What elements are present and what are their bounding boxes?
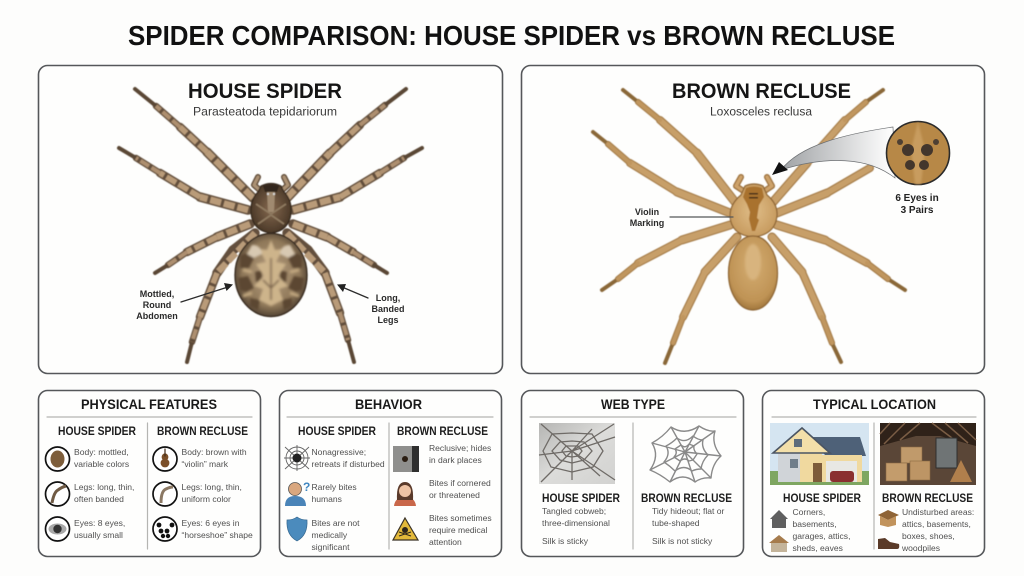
heading: brown recluse: BROWN RECLUSE	[672, 79, 851, 103]
text: medical attention	[429, 513, 492, 547]
text: eyes small	[74, 518, 125, 540]
icon: warning triangle	[393, 518, 418, 540]
panel: brown recluse	[522, 66, 984, 374]
text: recluse locations: boxes, shoes,	[902, 531, 955, 541]
callout: violin marking: Violin	[635, 207, 659, 217]
image: tidy spider web	[650, 426, 721, 482]
text: legs uniform: uniform color	[182, 494, 231, 504]
icon: person with question mark	[285, 480, 310, 506]
text: reclusive	[429, 443, 491, 465]
callout: long banded legs: Banded	[371, 304, 405, 314]
text: cobweb: three-dimensional	[542, 518, 610, 528]
label: 6 eyes in 3 pairs: 3 Pairs	[901, 205, 934, 216]
scientific name: brown recluse: Loxosceles reclusa	[710, 104, 812, 118]
subheading: house spider: HOUSE SPIDER	[783, 493, 862, 505]
icon: cardboard box	[878, 510, 899, 527]
heading: TYPICAL LOCATION	[813, 397, 936, 412]
text: house spider locations	[792, 507, 850, 553]
text: hideout: Silk is not sticky	[652, 536, 713, 546]
panel: physical features	[38, 390, 260, 556]
text: legs uniform: Legs: long, thin,	[182, 482, 242, 492]
icon: leg uniform	[153, 482, 177, 506]
leg: third left	[602, 225, 730, 290]
leg: upper right	[287, 89, 406, 198]
icon: web with spider	[284, 445, 310, 471]
leg: lower left	[665, 237, 737, 363]
text: legs banded: Legs: long, thin,	[74, 482, 134, 492]
text: body violin: Body: brown with	[182, 447, 247, 457]
icon: body mottled	[46, 447, 70, 471]
pedipalps	[736, 177, 772, 192]
callout: violin marking: Marking	[630, 218, 664, 228]
heading: WEB TYPE	[601, 397, 665, 412]
panel: typical location	[762, 390, 984, 556]
leg: lower right	[772, 237, 841, 362]
icon: small house	[770, 510, 788, 528]
text: cobweb: Tangled cobweb;	[542, 506, 606, 516]
subheading: brown recluse: BROWN RECLUSE	[641, 493, 732, 505]
text: body mottled	[74, 447, 129, 469]
text: house spider locations: sheds, eaves	[792, 543, 843, 553]
text: recluse locations: attics, basements,	[902, 519, 971, 529]
text: legs banded	[74, 482, 134, 504]
icon: garage	[769, 535, 789, 552]
text: body violin	[182, 447, 247, 469]
icon: eyes small	[46, 517, 70, 541]
text: hideout	[652, 506, 725, 546]
icon: leg banded	[46, 482, 70, 506]
abdomen: smooth	[728, 236, 778, 310]
subheading: house spider: HOUSE SPIDER	[58, 426, 137, 438]
subheading: house spider: HOUSE SPIDER	[298, 426, 377, 438]
image: house illustration	[770, 423, 869, 485]
text: nonaggressive	[312, 447, 385, 469]
illustration: house spider	[119, 89, 422, 362]
illustration: brown recluse	[593, 90, 905, 363]
text: legs uniform	[182, 482, 242, 504]
subheading: house spider: HOUSE SPIDER	[542, 493, 621, 505]
text: eyes small: usually small	[74, 530, 123, 540]
icon: eyes horseshoe	[153, 517, 177, 541]
text: medical attention: Bites sometimes	[429, 513, 492, 523]
text: eyes horseshoe: “horseshoe” shape	[182, 530, 253, 540]
text: rarely bites: Rarely bites	[312, 482, 357, 492]
text: not medically significant: Bites are not	[312, 518, 360, 528]
text: not medically significant	[312, 518, 360, 552]
text: rarely bites	[312, 482, 357, 504]
leg: third right	[777, 225, 905, 290]
leg: second right	[293, 148, 422, 210]
text: not medically significant: significant	[312, 542, 350, 552]
text: eyes horseshoe	[182, 518, 253, 540]
leg: second left	[593, 132, 730, 213]
text: legs banded: often banded	[74, 494, 124, 504]
text: medical attention: require medical	[429, 525, 488, 535]
subheading: brown recluse: BROWN RECLUSE	[397, 426, 488, 438]
scientific name: house spider: Parasteatoda tepidariorum	[193, 104, 337, 118]
text: recluse locations: woodpiles	[901, 543, 940, 553]
text: body violin: “violin” mark	[182, 459, 229, 469]
callout: mottled round abdomen: Abdomen	[136, 311, 178, 321]
text: cobweb	[542, 506, 610, 546]
eye circle	[886, 122, 950, 184]
text: recluse locations: Undisturbed areas:	[902, 507, 974, 517]
text: reclusive: Reclusive; hides	[429, 443, 491, 453]
callout: mottled round abdomen: Round	[143, 300, 171, 310]
callout: long banded legs: Long,	[376, 293, 400, 303]
text: reclusive: in dark places	[429, 455, 482, 465]
text: nonaggressive: Nonagressive;	[312, 447, 366, 457]
image: attic with boxes	[880, 423, 976, 485]
pedipalps	[254, 177, 288, 192]
text: hideout: tube-shaped	[652, 518, 700, 528]
cephalothorax: violin marking	[730, 184, 777, 237]
panel: behavior	[280, 390, 502, 556]
magnifier cone	[781, 127, 895, 178]
text: body mottled: variable colors	[74, 459, 129, 469]
text: eyes small: Eyes: 8 eyes,	[74, 518, 125, 528]
icon: person with question mark: ?	[303, 480, 310, 494]
icon: violin	[153, 447, 177, 471]
leg: upper right	[773, 90, 883, 202]
text: house spider locations: basements,	[792, 519, 837, 529]
leg: upper left	[623, 90, 735, 202]
text: not medically significant: medically	[312, 530, 348, 540]
image: tangled cobweb photo	[539, 423, 615, 484]
text: cobweb: Silk is sticky	[542, 536, 589, 546]
heading: house spider: HOUSE SPIDER	[188, 79, 342, 103]
text: bites if cornered: Bites if cornered	[429, 478, 491, 488]
leg: third right	[293, 224, 387, 273]
text: house spider locations: garages, attics,	[792, 531, 850, 541]
abdomen: mottled	[235, 234, 307, 316]
panel: house spider	[38, 66, 502, 374]
text: house spider locations: Corners,	[792, 507, 825, 517]
icon: shield	[287, 517, 307, 541]
subheading: brown recluse: BROWN RECLUSE	[157, 426, 248, 438]
text: body mottled: Body: mottled,	[74, 447, 129, 457]
arrowhead	[772, 162, 788, 175]
leg: upper left	[135, 89, 253, 198]
callout: long banded legs: Legs	[377, 315, 399, 325]
icon: alarmed woman	[394, 482, 416, 506]
callout: long banded legs	[337, 284, 405, 325]
label: 6 eyes in 3 pairs: 6 Eyes in	[895, 193, 939, 204]
text: recluse locations	[901, 507, 974, 553]
heading: BEHAVIOR	[355, 397, 422, 412]
icon: dark hiding place	[393, 446, 419, 472]
text: medical attention: attention	[429, 537, 462, 547]
subheading: brown recluse: BROWN RECLUSE	[882, 493, 973, 505]
leg: second left	[119, 148, 248, 210]
leg: second right	[777, 168, 870, 213]
leg: third left	[155, 224, 250, 273]
title: SPIDER COMPARISON: HOUSE SPIDER vs BROWN RECLUSE	[128, 20, 895, 51]
cephalothorax	[251, 184, 291, 233]
callout: violin marking	[630, 207, 733, 228]
text: eyes horseshoe: Eyes: 6 eyes in	[182, 518, 240, 528]
text: hideout: Tidy hideout; flat or	[652, 506, 725, 516]
leg: lower left	[187, 233, 255, 362]
text: bites if cornered	[429, 478, 491, 500]
text: bites if cornered: or threatened	[429, 490, 480, 500]
text: nonaggressive: retreats if disturbed	[312, 459, 385, 469]
callout: mottled round abdomen: Mottled,	[140, 289, 174, 299]
icon: shoe	[878, 538, 899, 549]
heading: PHYSICAL FEATURES	[81, 397, 217, 412]
leg: lower right	[287, 233, 354, 362]
callout: eye magnifier	[772, 122, 950, 216]
callout: mottled round abdomen	[136, 283, 233, 321]
label: 6 eyes in 3 pairs	[895, 193, 939, 216]
text: rarely bites: humans	[312, 494, 342, 504]
panel: web type	[522, 390, 744, 556]
